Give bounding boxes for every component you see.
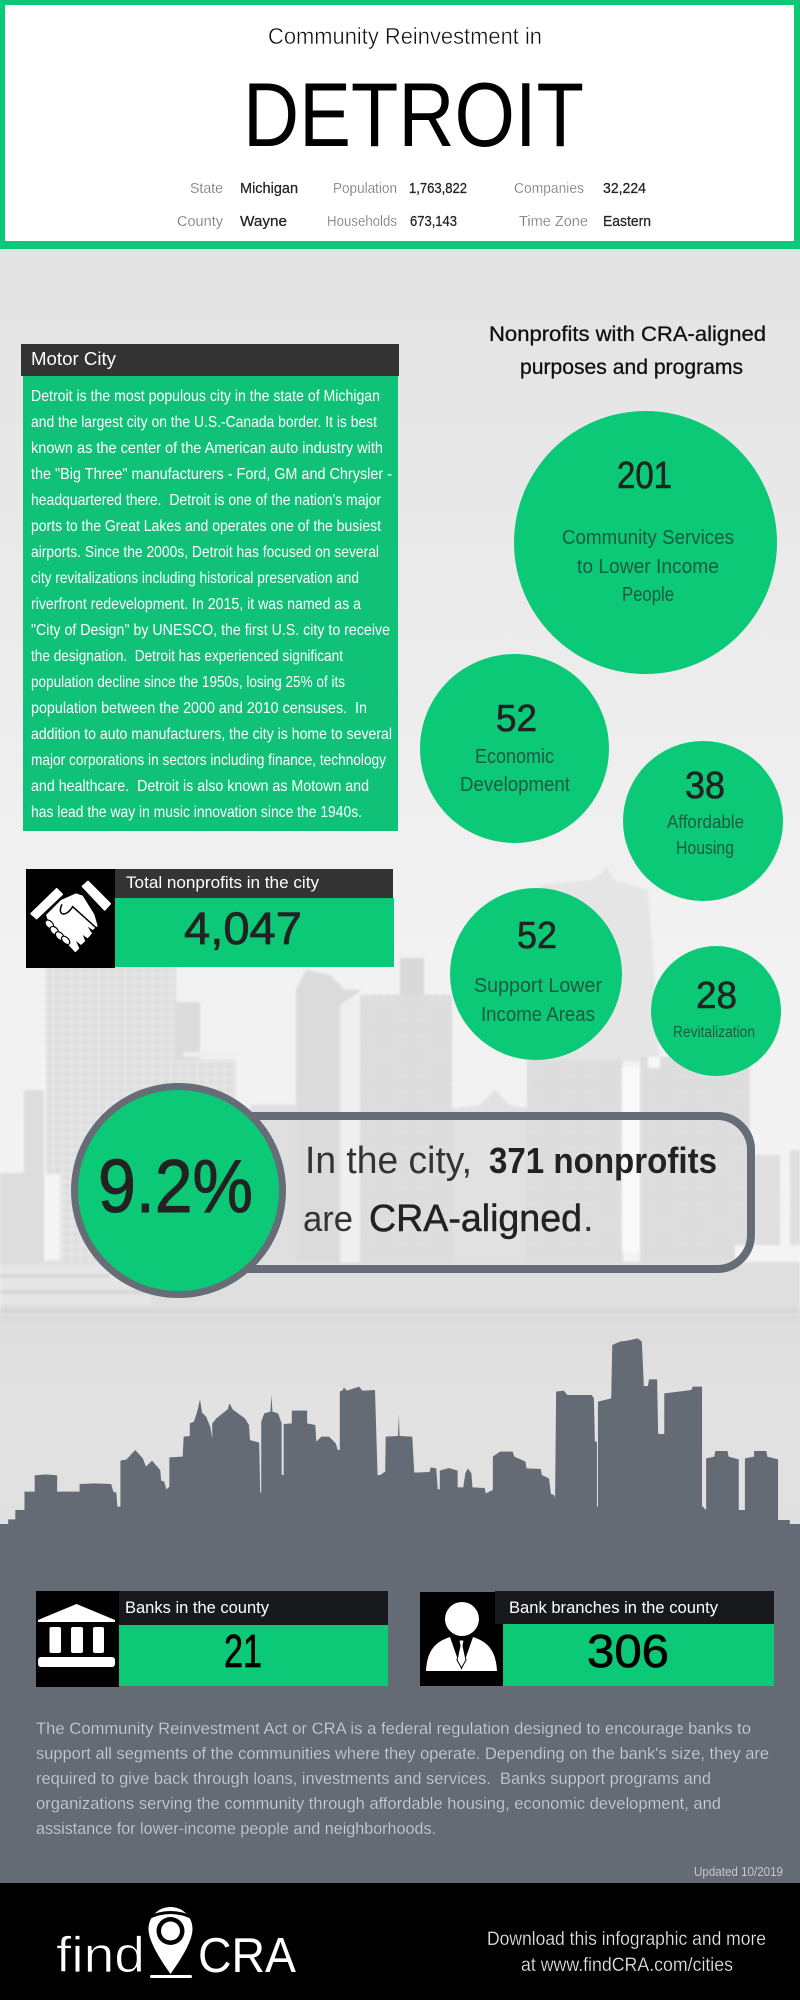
bubble: support lower income areas: Support Lower xyxy=(474,975,602,997)
stats table: 673,143 xyxy=(410,213,457,230)
stat card: total nonprofits: 4,047 xyxy=(184,903,302,954)
logo: findCRA xyxy=(56,1907,296,1983)
text block: CRA explanation: assistance for lower-income people and neighborhoods. xyxy=(36,1819,436,1838)
callout: CRA-aligned share: CRA-aligned xyxy=(369,1198,582,1240)
stats table: Households xyxy=(327,213,397,230)
stats table: State xyxy=(190,180,223,197)
bubble: revitalization: 28 xyxy=(696,975,737,1017)
icon: bank xyxy=(38,1604,115,1667)
heading: nonprofits with CRA-aligned purposes: purposes and programs xyxy=(520,356,743,379)
text block: CRA explanation xyxy=(36,1719,769,1838)
body text: "City of Design" by UNESCO, the first U.S. city to receive xyxy=(31,622,390,639)
bubble: community services: People xyxy=(622,584,674,606)
text block: CRA explanation: support all segments of the communities where they operate. Depending on the bank's size, they are xyxy=(36,1744,769,1763)
body text: population between the 2000 and 2010 censuses. In xyxy=(31,700,367,717)
callout: CRA-aligned share: 9.2% xyxy=(98,1144,253,1228)
stat card: bank branches in the county: Bank branches in the county xyxy=(509,1598,718,1617)
callout: CRA-aligned share: are xyxy=(303,1198,353,1239)
callout: CRA-aligned share: In the city, xyxy=(305,1140,472,1182)
panel: Motor City xyxy=(21,344,399,831)
text block: CRA explanation: organizations serving the community through affordable housing, economic development, and xyxy=(36,1794,721,1813)
callout: CRA-aligned share: 371 nonprofits xyxy=(489,1140,717,1181)
stats table xyxy=(177,180,651,230)
body text: addition to auto manufacturers, the city is home to several xyxy=(31,726,392,743)
bubble: economic development: Development xyxy=(460,774,570,796)
title: city name: DETROIT xyxy=(243,65,584,166)
body text xyxy=(31,388,392,821)
stat card: banks in the county xyxy=(36,1591,388,1687)
body text: the "Big Three" manufacturers - Ford, GM and Chrysler - xyxy=(31,466,392,483)
stats table: Michigan xyxy=(240,180,298,197)
callout: CRA-aligned share xyxy=(74,1086,751,1294)
body text: major corporations in sectors including finance, technology xyxy=(31,752,386,769)
bubble: support lower income areas: 52 xyxy=(517,915,557,957)
panel: Motor City: Motor City xyxy=(31,349,116,369)
stat card: total nonprofits xyxy=(26,869,394,968)
body text: riverfront redevelopment. In 2015, it was named as a xyxy=(31,596,361,613)
text block: CRA explanation: The Community Reinvestment Act or CRA is a federal regulation designed to encourage banks to xyxy=(36,1719,751,1738)
heading: nonprofits with CRA-aligned purposes: Nonprofits with CRA-aligned xyxy=(489,323,766,346)
subtitle: Community Reinvestment in xyxy=(268,23,542,49)
bubble: affordable housing xyxy=(623,741,783,901)
header panel xyxy=(0,0,800,249)
skyline silhouette xyxy=(0,1338,800,1560)
bubble: support lower income areas: Income Areas xyxy=(481,1004,595,1026)
stat card: banks in the county: Banks in the county xyxy=(125,1598,269,1617)
body text: headquartered there. Detroit is one of the nation's major xyxy=(31,492,382,509)
stats table: Population xyxy=(333,180,397,197)
bubble: support lower income areas xyxy=(450,888,622,1060)
body text: has lead the way in music innovation since the 1940s. xyxy=(31,804,362,821)
bubble: affordable housing: 38 xyxy=(685,765,725,807)
bubble: community services: Community Services xyxy=(562,527,734,549)
stats table: Eastern xyxy=(603,213,651,230)
bubble: revitalization xyxy=(651,946,781,1076)
body text: population decline since the 1950s, losing 25% of its xyxy=(31,674,345,691)
bubble: community services xyxy=(514,411,777,674)
bubble: affordable housing: Housing xyxy=(676,837,734,858)
dark gray lower panel xyxy=(0,1558,800,1884)
logo: findCRA: CRA xyxy=(198,1929,296,1983)
bubble: revitalization: Revitalization xyxy=(673,1024,755,1041)
background: skyline photo xyxy=(0,249,800,1555)
bubble: economic development: Economic xyxy=(475,746,554,768)
stats table: Time Zone xyxy=(519,213,588,230)
body text: Detroit is the most populous city in the state of Michigan xyxy=(31,388,380,405)
body text: the designation. Detroit has experienced significant xyxy=(31,648,343,665)
stat card: bank branches in the county xyxy=(420,1591,774,1686)
body text: and healthcare. Detroit is also known as Motown and xyxy=(31,778,369,795)
body text: city revitalizations including historical preservation and xyxy=(31,570,359,587)
footer panel xyxy=(0,1883,800,2000)
body text: airports. Since the 2000s, Detroit has focused on several xyxy=(31,544,379,561)
body text: ports to the Great Lakes and operates one of the busiest xyxy=(31,518,381,535)
heading: nonprofits with CRA-aligned purposes xyxy=(489,323,766,379)
download note xyxy=(487,1929,766,1976)
icon: map pin xyxy=(148,1907,193,1978)
body text: and the largest city on the U.S.-Canada border. It is best xyxy=(31,414,377,431)
callout: CRA-aligned share: . xyxy=(583,1198,594,1240)
icon: person in suit xyxy=(426,1602,497,1671)
stats table: Wayne xyxy=(240,213,287,230)
stat card: banks in the county: 21 xyxy=(224,1625,262,1677)
stats table: County xyxy=(177,213,223,230)
bubble: economic development xyxy=(420,654,609,843)
stats table: 1,763,822 xyxy=(409,180,467,197)
icon: handshake xyxy=(31,882,110,952)
bubble: community services: to Lower Income xyxy=(577,556,719,578)
stats table: 32,224 xyxy=(603,180,646,197)
stat card: total nonprofits: Total nonprofits in the city xyxy=(126,874,320,892)
updated date note: Updated 10/2019 xyxy=(694,1865,783,1879)
logo: findCRA: find xyxy=(56,1927,145,1983)
bubble: affordable housing: Affordable xyxy=(667,811,744,832)
bubble: economic development: 52 xyxy=(496,698,537,740)
download note: Download this infographic and more xyxy=(487,1929,766,1950)
body text: known as the center of the American auto industry with xyxy=(31,440,383,457)
text block: CRA explanation: required to give back through loans, investments and services. Banks support programs and xyxy=(36,1769,711,1788)
download note: at www.findCRA.com/cities xyxy=(521,1955,733,1976)
stats table: Companies xyxy=(514,180,584,197)
bubble: community services: 201 xyxy=(617,455,672,497)
stat card: bank branches in the county: 306 xyxy=(587,1625,669,1677)
